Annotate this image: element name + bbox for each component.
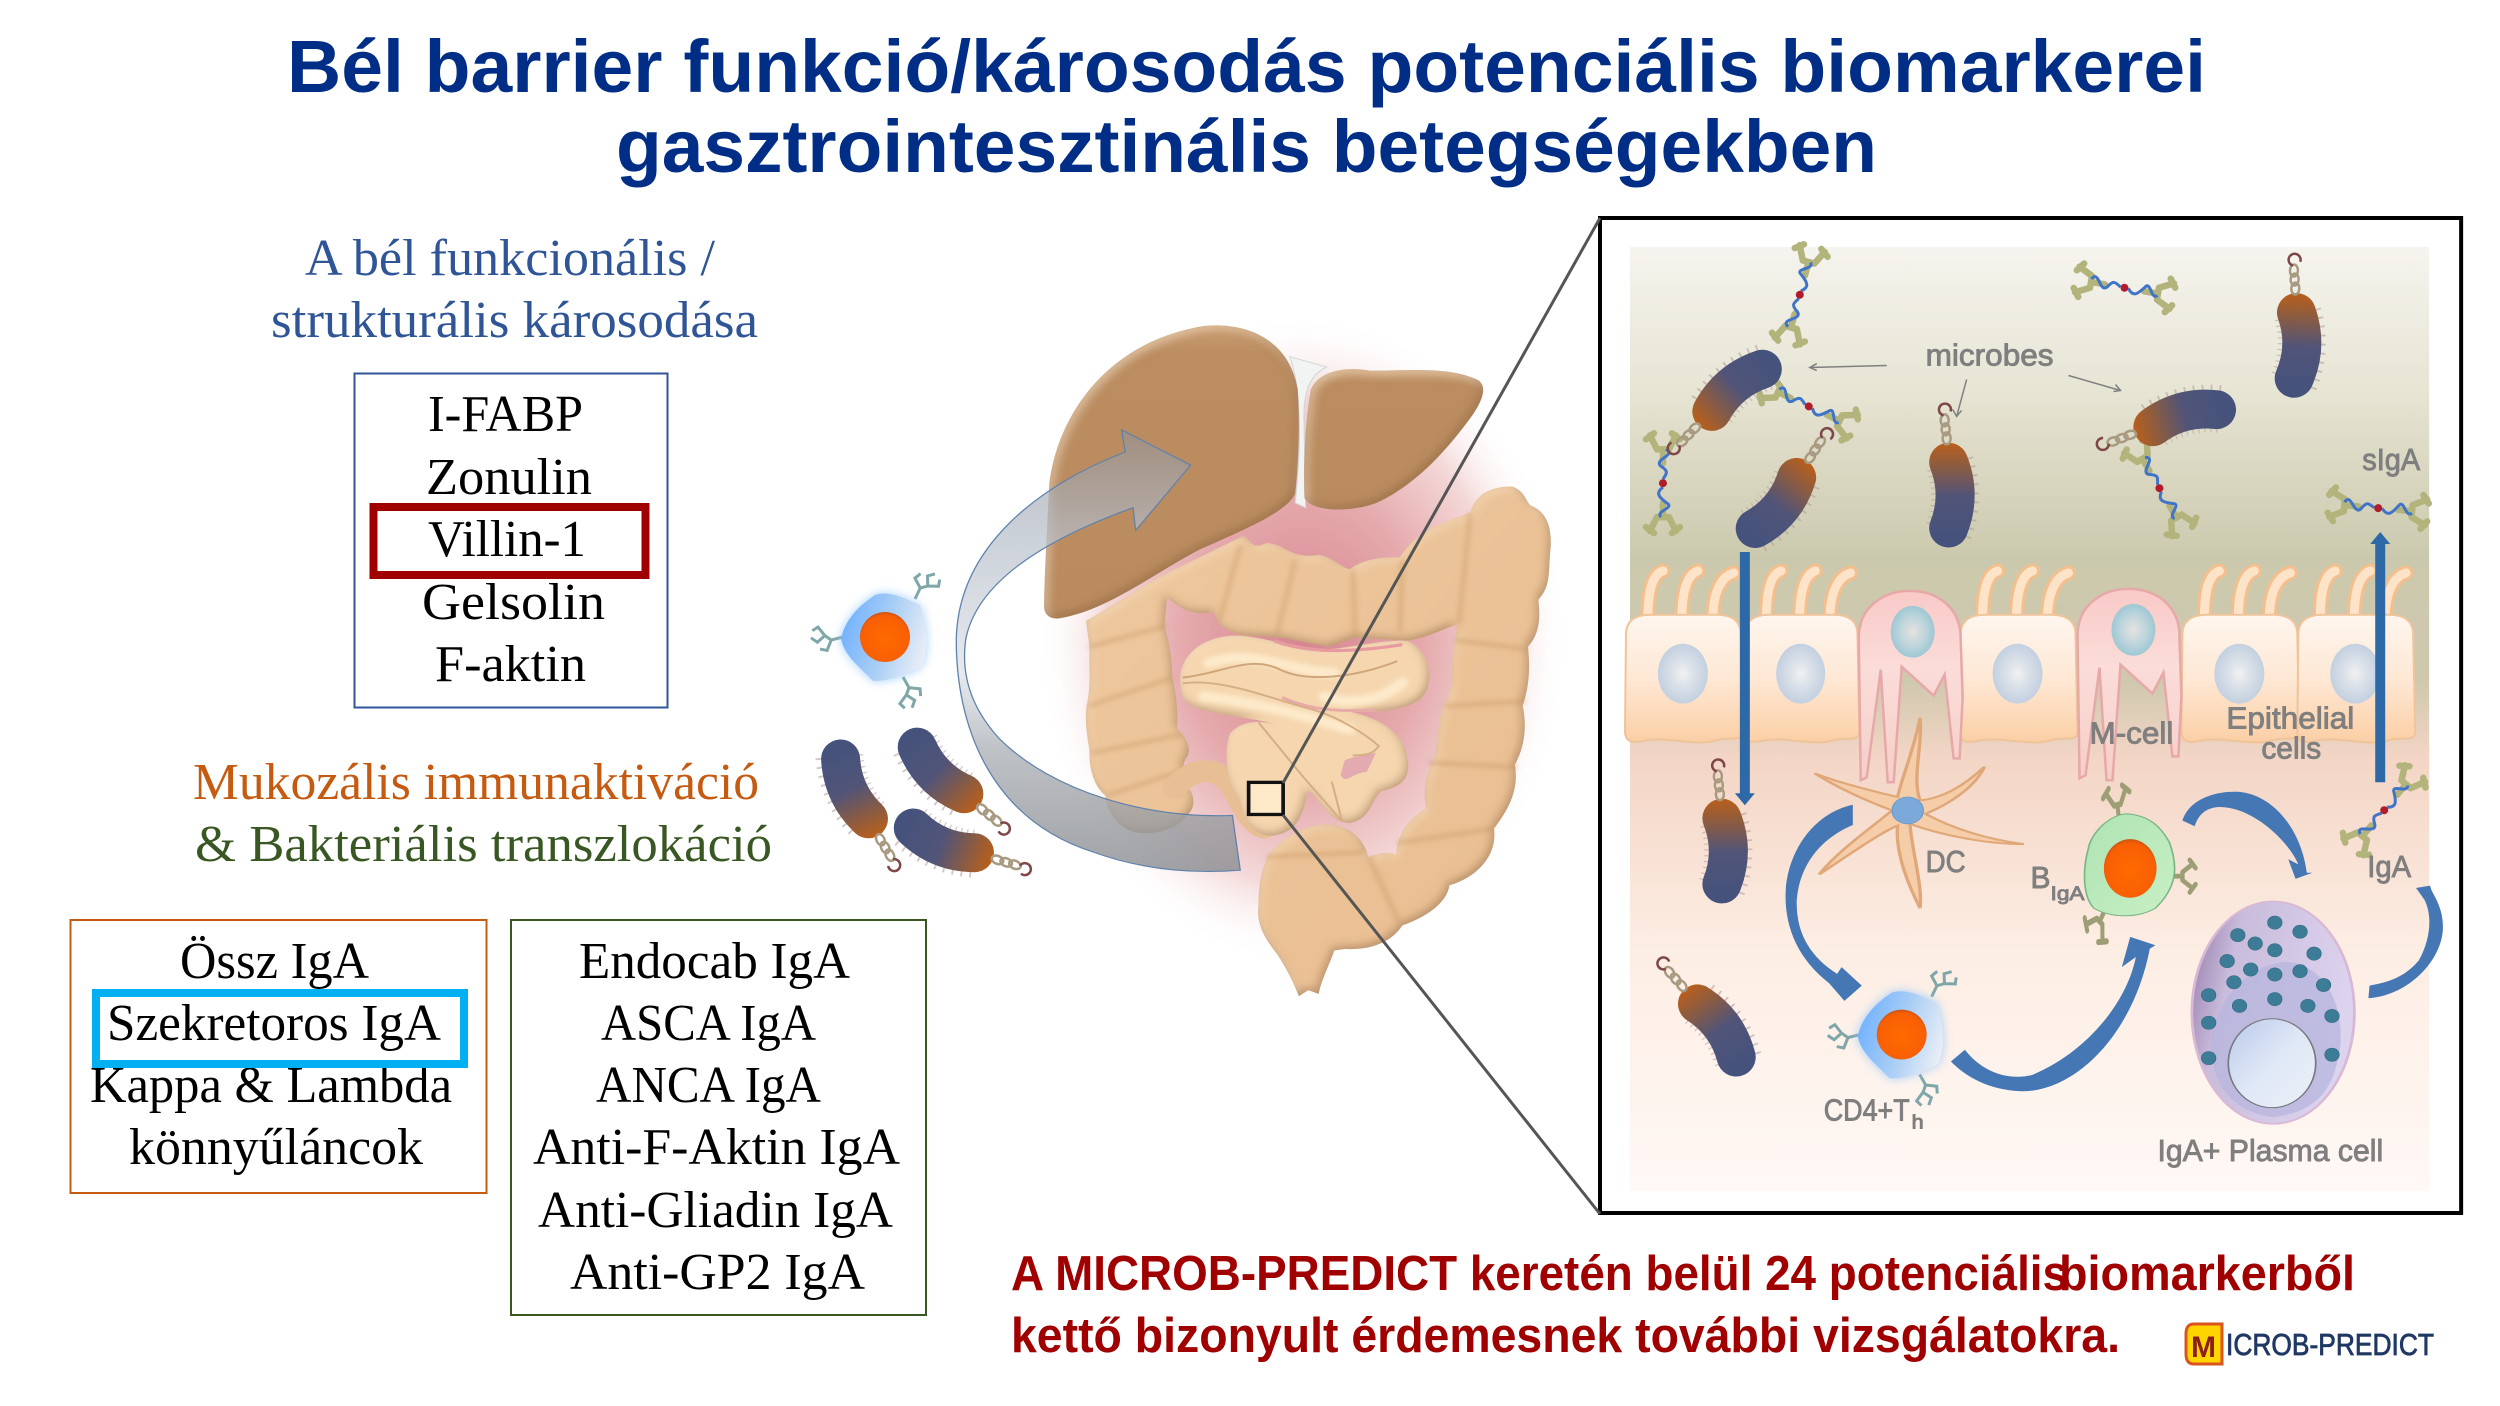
M cells <box>1859 589 2181 782</box>
ileum tube <box>1175 771 1264 828</box>
microbes pointer arrows <box>1810 364 2120 416</box>
panel: structural damage markers: Zonulin <box>426 449 592 506</box>
panel: IgA markers: Kappa & Lambda <box>90 1057 452 1114</box>
heading: mucosal immune activation and bacterial translocation: Mukozális immunaktiváció <box>193 754 759 811</box>
antibodies on B cell <box>2082 784 2196 948</box>
diagram labels: CD4+T <box>1824 1092 1910 1127</box>
heading: functional and structural gut damage: A bél funkcionális / <box>305 230 716 287</box>
title: gasztrointesztinális betegségekben <box>616 105 1877 188</box>
dendritic cell <box>1815 718 2024 908</box>
microbes <box>1655 254 2305 1065</box>
arrow: down into lamina propria <box>1735 552 1755 805</box>
conclusion text: A MICROB-PREDICT keretén belül 24 potenciális <box>1011 1247 2068 1301</box>
panel: antibody markers: ANCA IgA <box>596 1057 821 1114</box>
zoom lines to diagram <box>1283 218 1600 1214</box>
heading: mucosal immune activation and bacterial translocation <box>193 754 772 873</box>
diagram background <box>1630 247 2429 1191</box>
arrow: translocation to liver <box>956 430 1240 871</box>
small intestine folds <box>1183 641 1402 822</box>
panel: mucosal immunology diagram <box>1600 218 2461 1213</box>
plasma cell <box>2192 901 2354 1124</box>
panel: structural damage markers: F-aktin <box>435 636 586 693</box>
zoom marker <box>1249 782 1283 814</box>
cells and curved arrows <box>1786 718 2443 1124</box>
heading: functional and structural gut damage: strukturális károsodása <box>271 292 758 349</box>
diagram labels: Epithelial <box>2226 700 2354 735</box>
colon folds <box>1089 512 1528 923</box>
colon <box>1086 486 1551 996</box>
panel: antibody markers: Endocab IgA <box>579 933 850 990</box>
B cell <box>2085 814 2175 916</box>
panel: antibody markers: Anti-F-Aktin IgA <box>533 1119 900 1176</box>
panel: antibody markers <box>511 920 926 1315</box>
diagram labels <box>1824 338 2421 1168</box>
logo: MICROB-PREDICT: ICROB-PREDICT <box>2226 1327 2434 1362</box>
B cell nucleus <box>2104 839 2157 898</box>
heading: functional and structural gut damage <box>271 230 758 349</box>
secretory IgA molecules <box>1646 242 2429 859</box>
panel: IgA markers: Össz IgA <box>180 933 369 990</box>
conclusion text: biomarkerből <box>2059 1247 2355 1301</box>
organ glow <box>1038 315 1568 965</box>
small intestine <box>1180 636 1430 836</box>
diagram labels: IgA <box>2367 849 2412 884</box>
panel: antibody markers: Anti-GP2 IgA <box>570 1244 865 1301</box>
T cell in lamina propria <box>1827 964 1960 1108</box>
title <box>287 25 2206 188</box>
heading: mucosal immune activation and bacterial translocation: & Bakteriális transzlokáció <box>195 816 772 873</box>
diagram labels: DC <box>1926 844 1966 879</box>
logo: MICROB-PREDICT <box>2186 1324 2434 1364</box>
ligament <box>1290 357 1327 508</box>
diagram labels: h <box>1912 1112 1924 1133</box>
diagram labels: sIgA <box>2362 442 2421 477</box>
diagram labels: microbes <box>1926 338 2054 373</box>
conclusion text <box>1011 1247 2355 1363</box>
panel: structural damage markers: I-FABP <box>428 386 583 443</box>
icon: bacterium <box>833 752 902 875</box>
illustration: gut and liver <box>956 325 1551 996</box>
logo: MICROB-PREDICT: M <box>2191 1331 2216 1364</box>
diagram labels: IgA <box>2051 884 2085 905</box>
diagram labels: IgA+ Plasma cell <box>2157 1133 2383 1168</box>
liver <box>1044 325 1483 619</box>
panel: IgA markers <box>70 920 486 1193</box>
panel: structural damage markers: Villin-1 <box>428 511 586 568</box>
epithelial cells <box>1625 571 2415 742</box>
panel: IgA markers: könnyűláncok <box>129 1119 423 1176</box>
conclusion text: kettő bizonyult érdemesnek további vizsgálatokra. <box>1011 1309 2120 1363</box>
title: Bél barrier funkció/károsodás potenciális biomarkerei <box>287 25 2206 108</box>
panel: antibody markers: ASCA IgA <box>601 995 816 1052</box>
dendritic cell nucleus <box>1892 797 1923 824</box>
arrow: up to lumen <box>2370 532 2390 782</box>
diagram labels: B <box>2031 860 2051 895</box>
highlight: Villin-1 <box>374 507 646 575</box>
icon: bacterium <box>908 818 1033 881</box>
panel: structural damage markers <box>354 374 668 708</box>
highlight: secretory IgA <box>96 993 464 1064</box>
panel: structural damage markers: Gelsolin <box>422 574 605 631</box>
curved arrows <box>1786 792 2443 1091</box>
icon: T cell <box>810 566 943 711</box>
panel: antibody markers: Anti-Gliadin IgA <box>538 1182 893 1239</box>
diagram labels: cells <box>2261 730 2321 765</box>
diagram labels: M-cell <box>2090 715 2173 750</box>
panel: IgA markers: Szekretoros IgA <box>107 995 441 1052</box>
icon: bacterium <box>910 738 1012 840</box>
